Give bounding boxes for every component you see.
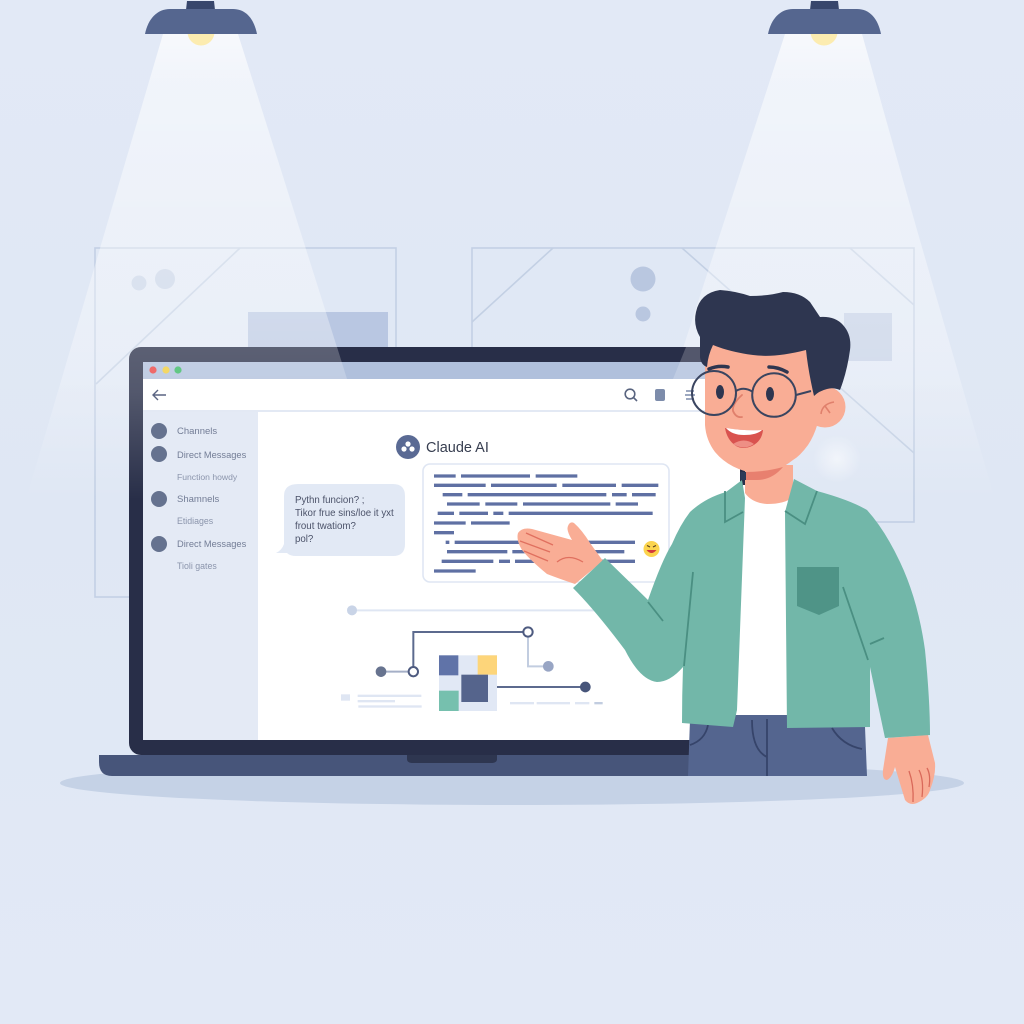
- ceiling lamp right: [768, 1, 881, 46]
- left hand: [518, 522, 603, 584]
- icon: menu: [685, 391, 695, 399]
- connector lines: [381, 632, 585, 687]
- chat bubble: [276, 484, 405, 556]
- sidebar item: Channels: [151, 423, 217, 439]
- face: [705, 345, 821, 474]
- sidebar: [143, 412, 258, 740]
- lid light reflection left: [129, 347, 347, 500]
- laptop base: [99, 755, 700, 776]
- hair: [695, 290, 850, 396]
- timeline: [347, 605, 597, 615]
- jacket collar and fold lines: [648, 491, 884, 666]
- sidebar item: Direct Messages 2: [151, 536, 247, 552]
- chat bubble: Pythn funcion? ;: [295, 495, 364, 506]
- sidebar item: Channels: Channels: [177, 426, 217, 437]
- main content pane: [258, 412, 740, 740]
- sidebar item: Shamnels: [151, 491, 219, 507]
- ear: [804, 386, 846, 428]
- chat bubble: frout twatiom?: [295, 521, 356, 532]
- hinge notch: [407, 755, 497, 763]
- sidebar sub item: Tioli gates: [177, 561, 217, 571]
- laptop lid: [129, 347, 760, 755]
- wall frame left: [95, 248, 396, 597]
- traffic lights: [149, 366, 182, 374]
- presenter character: [518, 290, 935, 804]
- lid light reflection right: [673, 347, 730, 379]
- connector diagram: [341, 605, 603, 711]
- glasses: [692, 371, 811, 417]
- toolbar: [143, 379, 740, 411]
- eyebrows: [709, 366, 787, 372]
- sidebar item: Direct Messages: [151, 446, 247, 462]
- chat bubble: pol?: [295, 534, 314, 545]
- right caption lines: [510, 702, 603, 704]
- head: [692, 290, 850, 480]
- sidebar item: Shamnels: Shamnels: [177, 494, 219, 505]
- trousers: [688, 711, 867, 776]
- Claude AI header: [396, 435, 489, 459]
- icon: Claude logo: [396, 435, 420, 459]
- laptop: [99, 347, 760, 776]
- collar shadow: [740, 472, 746, 480]
- toolbar divider: [143, 410, 740, 412]
- icon: back arrow: [153, 390, 166, 400]
- jacket: [573, 479, 930, 738]
- eyes: [716, 385, 774, 401]
- heading: Claude AI: Claude AI: [426, 440, 489, 456]
- wall frame right: [472, 248, 914, 522]
- t-shirt: [736, 485, 788, 715]
- sidebar item: Direct Messages: Direct Messages: [177, 450, 247, 460]
- sidebar sub item: Function howdy: [177, 472, 238, 482]
- table shadow: [60, 761, 964, 805]
- nose: [733, 395, 742, 417]
- light cone left: [26, 34, 382, 500]
- colored block grid: [439, 655, 497, 711]
- right hand: [883, 735, 935, 804]
- icon: document: [655, 389, 665, 401]
- code lines: [434, 476, 658, 571]
- jacket pocket: [797, 567, 839, 615]
- sidebar item: Direct Messages 2: Direct Messages: [177, 539, 247, 549]
- left caption lines: [341, 694, 422, 708]
- ceiling lamp left: [145, 1, 257, 46]
- mouth: [725, 428, 763, 448]
- neck shadow: [745, 467, 783, 480]
- light cone right: [640, 34, 995, 500]
- chat bubble: Tikor frue sins/loe it yxt: [295, 508, 394, 519]
- response card: [423, 464, 669, 582]
- icon: smiling emoji: [644, 541, 660, 557]
- screen: [129, 347, 740, 740]
- window title bar: [143, 362, 740, 379]
- neck: [745, 465, 793, 504]
- sidebar sub item: Etidiages: [177, 516, 214, 526]
- nodes: [376, 627, 591, 692]
- icon: search: [625, 389, 637, 401]
